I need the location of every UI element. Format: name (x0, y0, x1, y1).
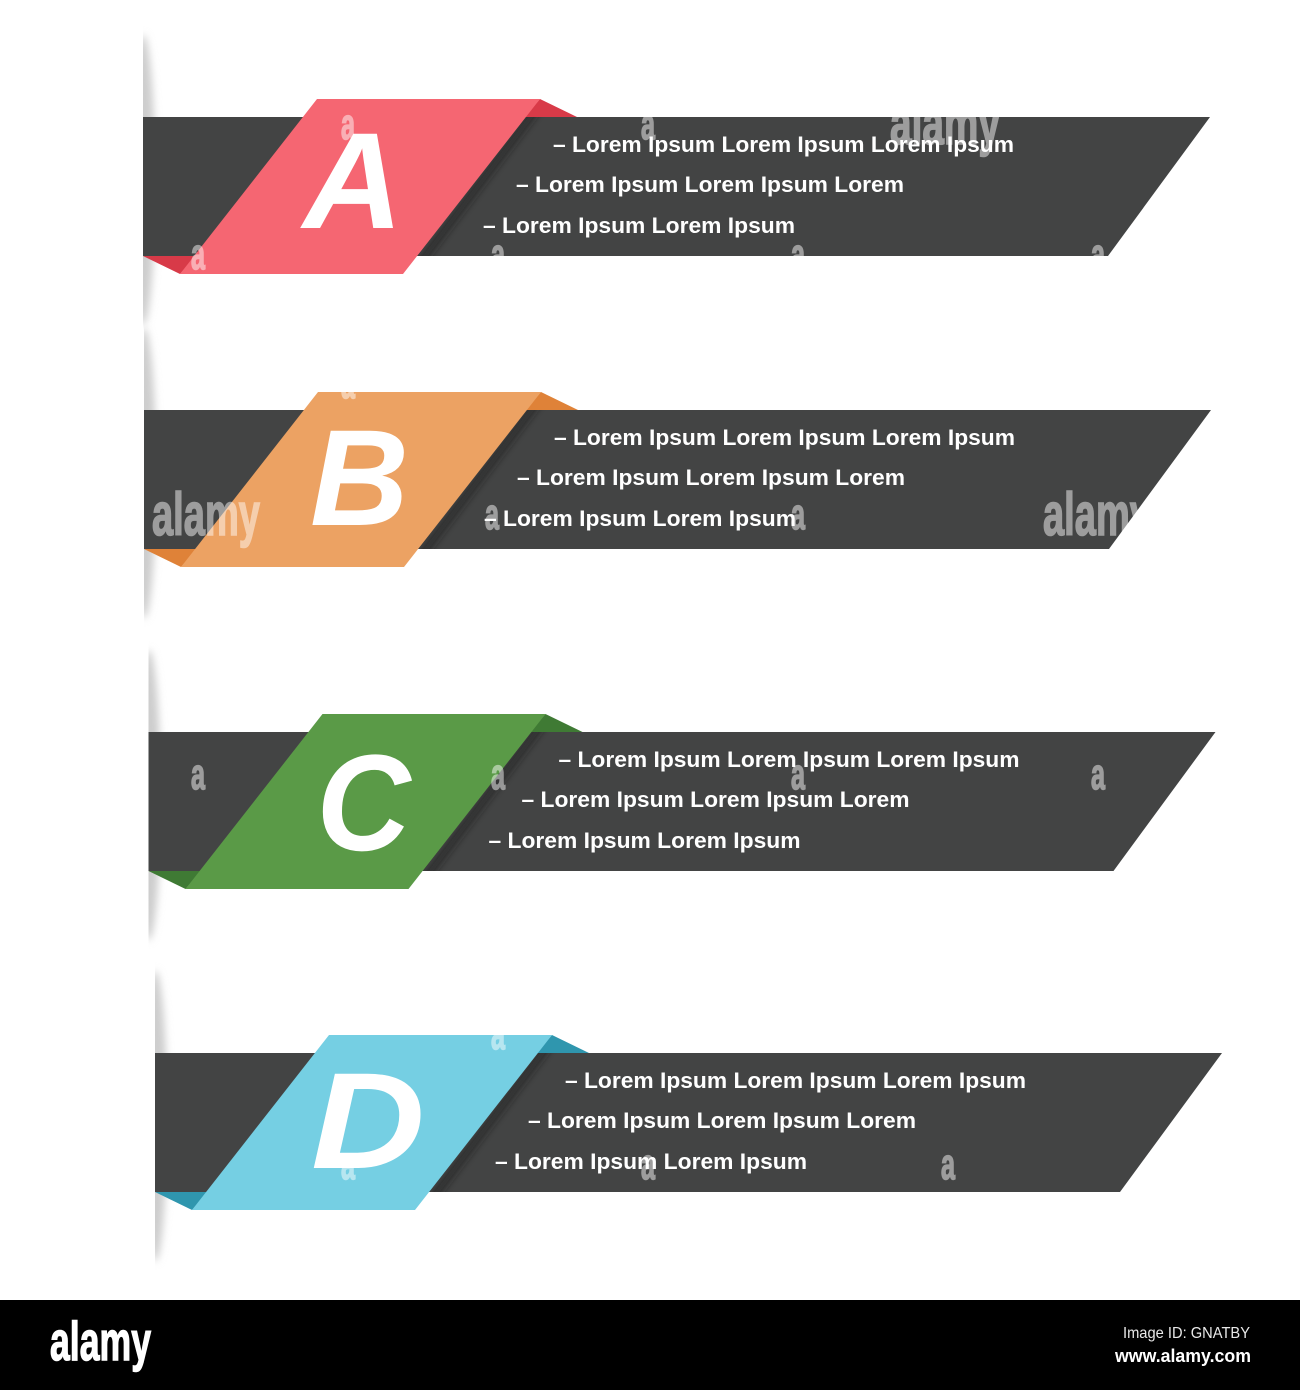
image id: Image ID: GNATBY (1123, 1325, 1250, 1342)
text lines C: – Lorem Ipsum Lorem Ipsum (488, 828, 800, 853)
watermarks: a (485, 490, 499, 539)
watermarks: a (1091, 230, 1105, 279)
dark band D (155, 1053, 1222, 1192)
ribbon D (192, 1035, 552, 1210)
ribbon C (186, 714, 546, 889)
letter C: C (316, 727, 412, 880)
watermarks: a (1091, 750, 1105, 799)
text lines A (483, 132, 1014, 238)
fold bottom C (148, 871, 202, 889)
fold bottom D (155, 1192, 208, 1210)
text lines D: – Lorem Ipsum Lorem Ipsum Lorem (528, 1108, 916, 1133)
fold top D (536, 1035, 589, 1053)
ribbon shadow A (418, 117, 539, 256)
letter D: D (311, 1045, 425, 1198)
banner D (143, 971, 1222, 1261)
page edge shadow A (143, 34, 158, 326)
watermarks: a (491, 750, 505, 799)
watermarks: a (791, 750, 805, 799)
footer logo: alamy (50, 1310, 151, 1372)
watermarks: a (341, 1140, 355, 1189)
text lines B (484, 425, 1015, 531)
watermarks: a (491, 1010, 505, 1059)
watermarks (152, 90, 1151, 1189)
ribbon shadow B (418, 410, 540, 549)
letter B: B (310, 402, 409, 555)
text lines D: – Lorem Ipsum Lorem Ipsum (495, 1149, 807, 1174)
letter A: A (300, 105, 403, 258)
website: www.alamy.com (1114, 1346, 1251, 1366)
watermarks: a (341, 100, 355, 149)
watermarks: a (641, 1140, 655, 1189)
text lines B: – Lorem Ipsum Lorem Ipsum Lorem (517, 465, 905, 490)
fold top C (530, 714, 582, 732)
watermarks: alamy (152, 481, 260, 548)
watermarks: a (791, 230, 805, 279)
watermarks: alamy (1043, 481, 1151, 548)
watermarks: a (341, 359, 355, 408)
ribbon shadow D (430, 1053, 551, 1192)
page edge shadow D (155, 970, 170, 1262)
watermarks: a (491, 230, 505, 279)
text lines A: – Lorem Ipsum Lorem Ipsum Lorem Ipsum (553, 132, 1014, 157)
page edge shadow B (144, 328, 158, 619)
text lines C: – Lorem Ipsum Lorem Ipsum Lorem Ipsum (558, 747, 1020, 772)
watermarks: a (941, 1140, 955, 1189)
fold top A (524, 99, 577, 117)
fold top B (525, 392, 578, 410)
footer bar (0, 1300, 1300, 1390)
text lines C: – Lorem Ipsum Lorem Ipsum Lorem (522, 787, 910, 812)
text lines C (488, 747, 1020, 853)
text lines D (495, 1068, 1026, 1174)
ribbon B (181, 392, 541, 567)
watermarks: alamy (890, 90, 1000, 157)
fold bottom B (144, 549, 197, 567)
banner C (136, 650, 1216, 940)
dark band C (148, 732, 1216, 871)
dark band B (144, 410, 1211, 549)
text lines A: – Lorem Ipsum Lorem Ipsum Lorem (516, 172, 904, 197)
ribbon shadow C (423, 732, 544, 871)
ribbon A (180, 99, 540, 274)
text lines B: – Lorem Ipsum Lorem Ipsum (484, 506, 796, 531)
watermarks: a (641, 100, 655, 149)
page edge shadow C (148, 649, 163, 941)
text lines A: – Lorem Ipsum Lorem Ipsum (483, 213, 795, 238)
dark band A (143, 117, 1210, 256)
fold bottom A (143, 256, 196, 274)
watermarks: a (191, 230, 205, 279)
banner B (132, 328, 1211, 618)
text lines D: – Lorem Ipsum Lorem Ipsum Lorem Ipsum (565, 1068, 1026, 1093)
watermarks: a (191, 750, 205, 799)
text lines B: – Lorem Ipsum Lorem Ipsum Lorem Ipsum (554, 425, 1015, 450)
watermarks: a (791, 490, 805, 539)
banner A (131, 35, 1210, 325)
